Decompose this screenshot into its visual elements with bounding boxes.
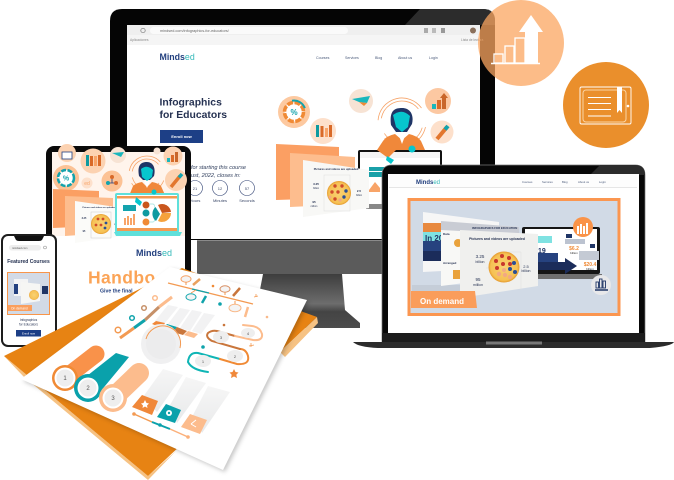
countdown [188, 180, 255, 203]
tablet slides: 95 [83, 230, 86, 233]
countdown text: ust, 2022, closes in: [191, 173, 241, 179]
icon: percent circle [278, 96, 310, 128]
tablet slides: 2.5 [114, 223, 118, 226]
icon: tablet book circle [563, 62, 649, 148]
sheet large dial [141, 324, 181, 364]
tablet hero background [52, 152, 185, 236]
bars badge [591, 275, 611, 295]
on-demand card [409, 200, 619, 314]
icon: percent circle: % [290, 108, 298, 117]
front slide: billion [476, 260, 485, 264]
tablet icons: ed [84, 181, 90, 187]
sheet pins [115, 296, 157, 333]
laptop screen [388, 174, 639, 333]
tablet icons: % [63, 176, 70, 182]
tablet presenter [126, 153, 168, 196]
sheet snake badges [195, 328, 255, 367]
countdown: Hours [190, 198, 200, 203]
icon: growth chart circle [478, 0, 564, 86]
tablet teal laptop [114, 190, 182, 236]
slide: pictures and videos: million [311, 205, 318, 208]
phone course title: Infographics [20, 318, 38, 322]
countdown text: for starting this course [191, 165, 246, 171]
sheet timeline [168, 276, 268, 326]
slide: pictures and videos: billion [313, 187, 320, 190]
site navigation: About us [398, 56, 412, 60]
middle slide: Arranged [443, 261, 457, 265]
sheet snake badges: 4 [247, 331, 250, 336]
front slide: Pictures and videos are uploaded [469, 237, 525, 241]
site navigation [316, 56, 438, 60]
sheet peach pill [99, 373, 139, 412]
front slide: billion [522, 269, 531, 273]
laptop navigation: Courses [522, 180, 533, 184]
infographic sheet [21, 267, 307, 470]
browser bar: Aplicaciones [130, 38, 149, 42]
presenter illustration [371, 91, 433, 164]
card pizza [488, 252, 520, 282]
countdown: 12 [218, 186, 223, 191]
countdown: Minutes [213, 198, 227, 203]
laptop [353, 165, 674, 348]
hero heading: Infographics [160, 98, 222, 108]
countdown: 57 [245, 186, 250, 191]
site logo: Mindsed [160, 52, 195, 62]
icon: growth arrow circle [425, 88, 451, 114]
site navigation: Services [345, 56, 359, 60]
on demand ribbon: On demand [420, 297, 464, 306]
sheet small squares [152, 321, 198, 338]
monitor stand [197, 239, 383, 328]
tablet pizza [91, 214, 111, 234]
countdown: 21 [193, 186, 198, 191]
slide: pictures and videos: 2.5 [357, 189, 361, 193]
sheet snake badges: 2 [234, 354, 237, 359]
laptop within card: billion [586, 267, 594, 271]
monitor bezel [110, 9, 495, 240]
sheet snake path [188, 325, 262, 372]
icon: pencil circle [430, 120, 454, 144]
monitor screen [127, 25, 484, 239]
front slide: 2.5 [523, 264, 530, 269]
orange booklet [4, 268, 318, 480]
front slide: 3.25 [476, 254, 485, 259]
laptop navigation: Services [542, 180, 553, 184]
middle slide: INFOGRAPHICS FOR EDUCATION [472, 226, 517, 230]
on demand ribbon [411, 291, 477, 308]
sheet orange pill: 1 [63, 376, 67, 382]
chart badge [573, 217, 593, 237]
slide: pictures and videos: Pictures and videos are uploaded [314, 167, 359, 171]
laptop within card [512, 227, 602, 279]
sheet icon squares [132, 395, 207, 434]
countdown: Seconds [239, 198, 255, 203]
smartphone [1, 234, 57, 347]
sheet snake badges: 1 [202, 359, 205, 364]
sheet tall bars [143, 369, 230, 433]
front slide: 95 [475, 277, 481, 282]
small laptop [358, 150, 442, 209]
laptop within card: 19 [538, 248, 546, 255]
laptop logo: Mindsed [416, 180, 440, 186]
tablet logo: Mindsed [136, 248, 172, 258]
tablet slides: Pictures and videos are uploaded [82, 206, 116, 209]
tablet slides [53, 189, 123, 243]
front slide: million [473, 283, 483, 287]
sheet teal pill [74, 353, 129, 402]
handbook subtitle: Give the final [100, 288, 133, 294]
slide: pictures and videos [303, 160, 369, 217]
sheet gray bars [155, 305, 215, 334]
browser bar: mindsed.com/infographics-for-educators/ [160, 29, 230, 33]
pizza [327, 181, 351, 205]
middle slide: Data [443, 232, 450, 236]
laptop within card: billion [570, 251, 578, 255]
phone url bar: mindsed.com [12, 246, 27, 250]
sheet snake badges: 3 [220, 335, 223, 340]
middle slide [441, 221, 519, 286]
tablet [46, 144, 191, 336]
site navigation: Blog [375, 56, 382, 60]
front slide [460, 230, 538, 298]
sheet teal pill: 2 [86, 386, 90, 392]
browser bar: Lista de lectura [461, 38, 484, 42]
sheet orange pill [52, 354, 96, 391]
laptop navigation: Login [599, 180, 606, 184]
icon: paper plane circle [349, 89, 373, 113]
tablet icons [53, 144, 187, 192]
slide: pictures and videos: billion [356, 194, 363, 197]
laptop within card: $6.2 [569, 246, 579, 252]
sheet bottom timeline [132, 412, 190, 439]
enroll button [160, 130, 203, 143]
phone course title: for Educators [19, 322, 38, 326]
tablet presenter hands [135, 190, 156, 206]
icon: bar chart circle [310, 118, 336, 144]
site navigation: Courses [316, 56, 330, 60]
slide: pictures and videos: 3.25 [313, 182, 319, 186]
laptop navigation [522, 180, 606, 184]
site navigation: Login [429, 56, 438, 60]
back slide [423, 212, 499, 272]
slide stack [276, 144, 369, 217]
slide: pictures and videos: 95 [312, 200, 316, 204]
laptop navigation: Blog [562, 180, 568, 184]
tablet slides: 3.25 [82, 217, 87, 220]
sheet vertical progress line [120, 297, 172, 338]
phone button: Enroll now [22, 332, 36, 336]
tablet pie chart [152, 204, 171, 222]
enroll button: Enroll now [171, 134, 193, 139]
handbook title: Handbo [88, 268, 156, 288]
laptop navigation: About us [578, 180, 590, 184]
monitor [110, 9, 495, 328]
sheet peach pill: 3 [111, 396, 115, 402]
laptop base [353, 342, 674, 348]
browser bar [127, 25, 484, 45]
hero heading: for Educators [160, 110, 227, 121]
laptop within card: $20.4 [584, 262, 596, 268]
phone heading: Featured Courses [7, 259, 50, 265]
back slide: In 20 [425, 234, 444, 243]
phone on demand ribbon: On demand [11, 306, 28, 310]
sheet star [230, 369, 238, 378]
